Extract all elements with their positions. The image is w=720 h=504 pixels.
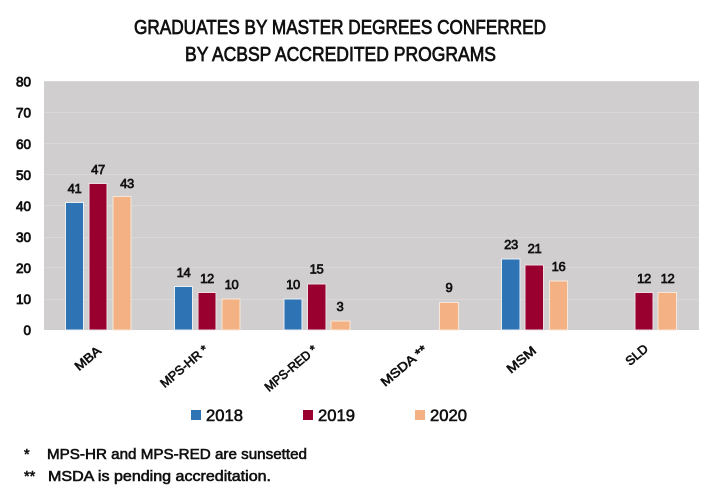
x axis labels: MSDA **: [378, 342, 430, 389]
group: MSDA: 9: [446, 280, 453, 295]
y axis labels: 0: [23, 323, 31, 338]
title: GRADUATES BY MASTER DEGREES CONFERRED: [134, 17, 546, 39]
bar chart: [16, 74, 699, 394]
plot area: [44, 81, 699, 330]
title: BY ACBSP ACCREDITED PROGRAMS: [185, 44, 496, 66]
title: [134, 17, 546, 66]
group: MPS-HR: 10: [225, 277, 238, 292]
x axis labels: MPS-RED *: [262, 342, 320, 394]
x axis labels: MBA: [72, 343, 104, 374]
group: SLD: 12: [637, 271, 651, 286]
group: MBA: 43: [120, 176, 134, 191]
group: MPS-HR: 12: [200, 271, 214, 286]
group: MPS-RED: 15: [310, 262, 323, 276]
group: MBA: 47: [91, 162, 105, 177]
x axis labels: MPS-HR *: [157, 342, 211, 391]
footnotes: *: [24, 447, 30, 463]
y axis labels: 80: [16, 74, 31, 90]
legend: 2020: 2020: [430, 406, 467, 425]
group: MPS-RED: 3: [337, 299, 344, 314]
group: SLD: [635, 271, 676, 330]
x axis labels: MSM: [504, 344, 539, 376]
group: MSM: 23: [504, 237, 518, 252]
group: SLD: 12: [661, 271, 674, 286]
y axis labels: 50: [16, 168, 31, 183]
footnotes: MSDA is pending accreditation.: [48, 469, 271, 485]
y axis labels: 40: [16, 199, 31, 214]
group: MPS-RED: 10: [286, 277, 300, 292]
y axis labels: 60: [16, 137, 31, 152]
group: MBA: 41: [68, 181, 81, 196]
group: MBA: [66, 162, 134, 330]
y axis labels: 30: [16, 230, 31, 245]
x axis labels: SLD: [623, 342, 651, 368]
legend: [191, 406, 467, 425]
group: MSDA: [440, 280, 458, 330]
y axis labels: 20: [16, 261, 31, 276]
group: MPS-HR: [174, 265, 240, 330]
legend: 2018: 2018: [206, 406, 243, 425]
group: MPS-HR: 14: [177, 265, 190, 280]
group: MSM: [502, 237, 568, 330]
y axis labels: 70: [16, 106, 31, 120]
y axis labels: 10: [16, 292, 31, 307]
group: MSM: 16: [552, 259, 565, 274]
y axis labels: [16, 74, 31, 338]
x axis labels: [72, 342, 651, 394]
footnotes: **: [24, 469, 36, 485]
footnotes: MPS-HR and MPS-RED are sunsetted: [47, 447, 307, 463]
group: MPS-RED: [284, 262, 350, 330]
footnotes: [24, 447, 307, 485]
group: MSM: 21: [528, 241, 541, 256]
legend: 2019: 2019: [318, 406, 355, 425]
